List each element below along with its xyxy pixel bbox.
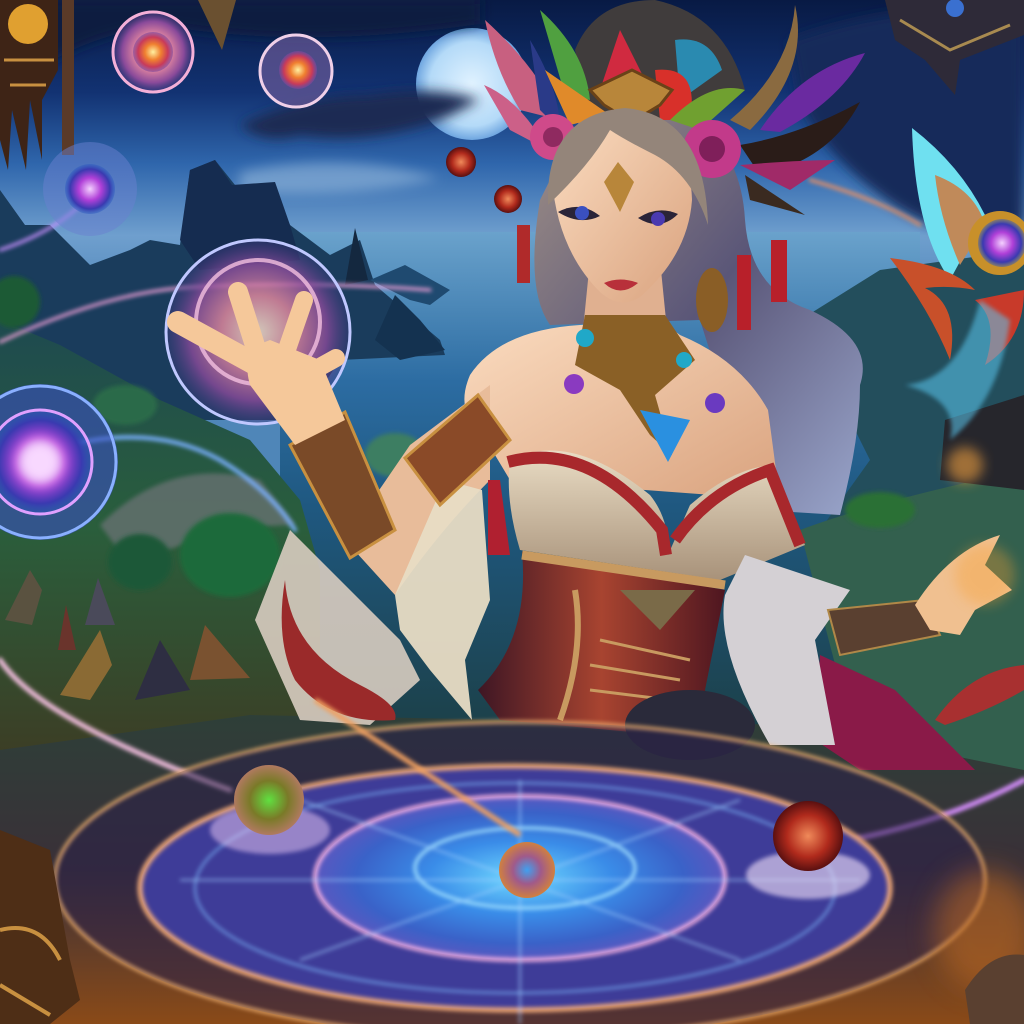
- winged creature: [890, 128, 1024, 440]
- large violet portal left: [0, 384, 118, 540]
- sea: [280, 232, 920, 732]
- corset: [478, 552, 725, 740]
- small red spheres: [446, 147, 522, 213]
- floating orb: amber: [260, 35, 332, 107]
- lower ground: [0, 715, 1024, 1024]
- lips and forehead jewel: [604, 162, 638, 290]
- temple at right: [845, 395, 1024, 528]
- left meadow: [0, 320, 320, 780]
- red sleeve lining: [282, 580, 396, 720]
- hair top bun: [575, 0, 745, 120]
- moon: [416, 28, 528, 140]
- shoulders and chest: [464, 320, 780, 500]
- hanging ornament top right: [885, 0, 1024, 95]
- stone path: [100, 473, 295, 565]
- pink roses: [530, 114, 741, 178]
- distant mountains and castle: [0, 160, 450, 420]
- jewelled necklace: [564, 315, 725, 462]
- neck: [582, 260, 668, 340]
- long flowing hair: [534, 110, 863, 515]
- clouds: [0, 0, 1024, 233]
- sphere green: [210, 765, 330, 854]
- portal behind hand: [166, 240, 350, 424]
- crimson skirt right: [815, 655, 975, 770]
- earrings and tassels: [517, 225, 787, 332]
- dark skirt flowers: [625, 690, 755, 760]
- upper left arm: [345, 385, 490, 595]
- red scarf: [935, 665, 1024, 725]
- warm ground glow right: [935, 870, 1024, 990]
- corset jewel clasp: [620, 590, 695, 630]
- right forearm: [828, 600, 940, 655]
- ornate carving bottom right: [965, 954, 1024, 1024]
- face: [552, 122, 692, 302]
- hanging ornaments top left: [0, 0, 236, 170]
- left forearm and hand: [178, 292, 345, 445]
- golden crown: [590, 70, 672, 122]
- red tassel: [488, 480, 510, 555]
- magic circle: [55, 700, 985, 1024]
- magic trail lines: [0, 180, 1024, 840]
- floating orb: red sun: [112, 11, 194, 93]
- sphere rainbow centre: [499, 842, 555, 898]
- trees: [0, 276, 425, 597]
- bodice red trim: [508, 458, 800, 555]
- eyes: [558, 206, 678, 226]
- left sleeve ruffle: [255, 530, 420, 725]
- left arm gauntlet: [290, 412, 395, 558]
- sphere red: [746, 801, 870, 899]
- left sleeve drape: [395, 480, 490, 720]
- right meadow: [800, 470, 1024, 780]
- armband upper: [405, 395, 510, 505]
- right hand: [915, 535, 1012, 635]
- tiny warriors: [5, 570, 250, 700]
- feathers headdress: [484, 5, 865, 215]
- right sleeve drape: [723, 555, 850, 745]
- ornate scroll bottom left: [0, 830, 80, 1024]
- cream bodice: [509, 451, 805, 580]
- fringe hair: [548, 108, 708, 225]
- right shore: [800, 250, 1024, 720]
- floating orb: violet: [43, 142, 137, 236]
- corset laces: [522, 555, 725, 720]
